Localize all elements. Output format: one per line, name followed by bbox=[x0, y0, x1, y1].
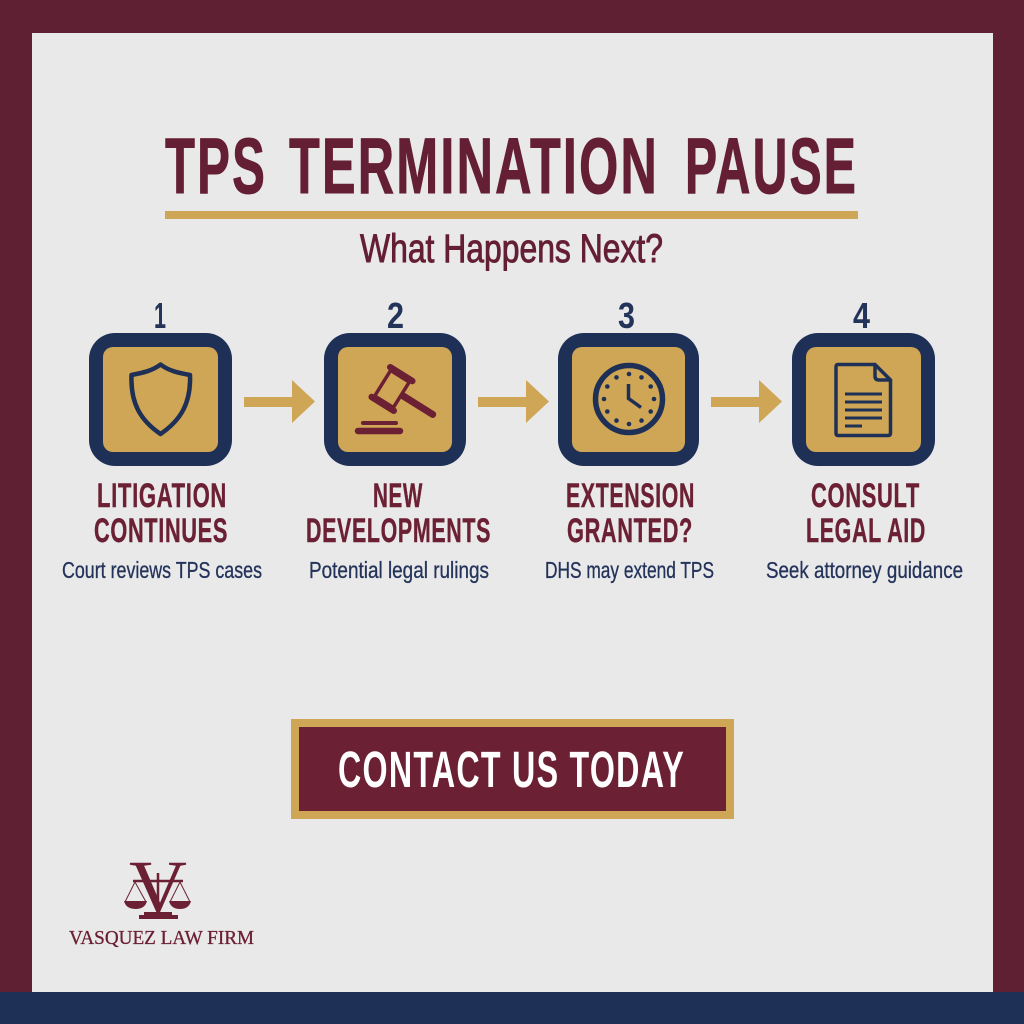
step 1 bbox=[62, 295, 262, 583]
logo: Vasquez Law Firm bbox=[69, 846, 254, 949]
arrow 2 to 3 bbox=[478, 380, 549, 423]
title: TPS bbox=[165, 121, 267, 210]
title: PAUSE bbox=[685, 121, 858, 210]
step 4 heading bbox=[806, 477, 926, 550]
subtitle: What Happens Next? bbox=[360, 227, 663, 271]
step 3 bbox=[545, 295, 714, 583]
step number 1: 1 bbox=[154, 295, 166, 336]
step 1 heading: LITIGATION bbox=[97, 477, 227, 515]
title underline bbox=[165, 211, 858, 219]
title: TERMINATION bbox=[289, 121, 659, 210]
icon tile: document bbox=[792, 333, 935, 466]
icon tile: clock bbox=[558, 333, 699, 466]
icon tile: gavel bbox=[324, 333, 466, 466]
arrow 3 to 4 bbox=[711, 380, 782, 423]
step 2 heading bbox=[306, 477, 491, 550]
icon tile: shield bbox=[89, 333, 232, 466]
logo wordmark: VASQUEZ LAW FIRM bbox=[69, 928, 254, 949]
step 1 heading bbox=[94, 477, 228, 550]
navy bottom bar bbox=[0, 992, 1024, 1024]
step 4 bbox=[766, 295, 963, 583]
step 1 heading: CONTINUES bbox=[94, 512, 228, 550]
logo monogram with scales: V bbox=[129, 846, 187, 930]
step 1 description: Court reviews TPS cases bbox=[62, 557, 262, 583]
step 4 heading: LEGAL AID bbox=[806, 512, 926, 550]
step 3 heading: EXTENSION bbox=[566, 477, 695, 515]
step 4 description: Seek attorney guidance bbox=[766, 557, 963, 583]
step 3 heading bbox=[566, 477, 695, 550]
step number 3: 3 bbox=[618, 295, 635, 336]
step 2 description: Potential legal rulings bbox=[309, 557, 489, 583]
step 2 bbox=[306, 295, 491, 583]
step number 2: 2 bbox=[387, 295, 404, 336]
step 3 description: DHS may extend TPS bbox=[545, 557, 714, 583]
step 2 heading: NEW bbox=[373, 477, 423, 515]
call to action button bbox=[295, 723, 730, 815]
step 4 heading: CONSULT bbox=[811, 477, 920, 515]
arrow 1 to 2 bbox=[244, 380, 315, 423]
step 3 heading: GRANTED? bbox=[567, 512, 693, 550]
step number 4: 4 bbox=[853, 295, 870, 336]
call to action button: CONTACT US TODAY bbox=[338, 741, 685, 798]
step 2 heading: DEVELOPMENTS bbox=[306, 512, 491, 550]
